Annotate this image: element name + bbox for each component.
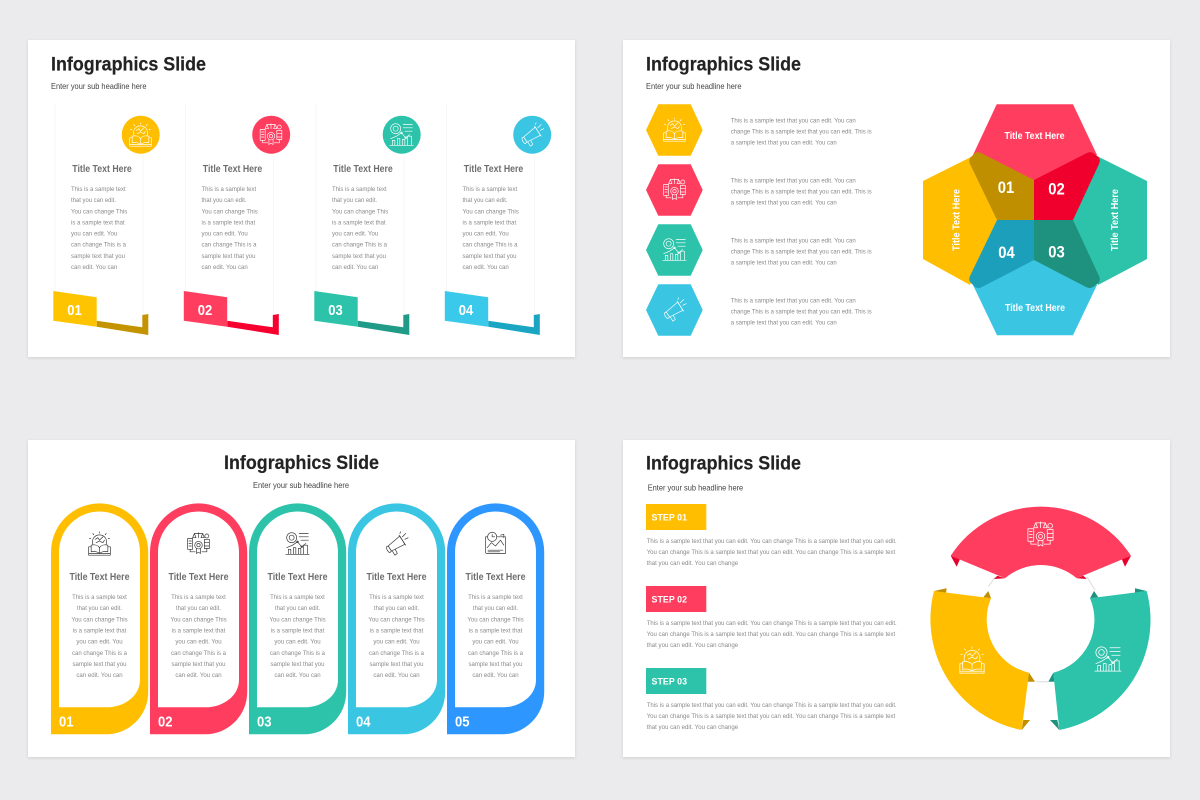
card 4 body: can change This is a [369, 650, 424, 657]
card 5 number: 05 [455, 714, 470, 730]
petal top [973, 104, 1097, 185]
column 2 body: that you can edit. [202, 197, 247, 204]
column 3 [314, 103, 421, 335]
petal right [1070, 156, 1147, 285]
card 4 body: that you can edit. [374, 605, 419, 612]
step 01 text: You can change This is a sample text that you can edit. You can change This is a sample text [647, 549, 895, 556]
column 1 body: can change This is a [71, 242, 126, 249]
column 4 tag [445, 291, 540, 335]
card 2 body: is a sample text that [172, 628, 226, 635]
card 3 body: is a sample text that [271, 628, 325, 635]
step 03 text: This is a sample text that you can edit. You can change This is a sample text that you can edit. [647, 702, 897, 709]
column 2 body: You can change This [202, 208, 258, 215]
step 01 text: that you can edit. You can change [647, 560, 738, 567]
column 3 body: sample text that you [332, 253, 386, 260]
card 1 body: is a sample text that [73, 628, 127, 635]
card 3 body: can edit. You can [274, 672, 321, 679]
heading: Infographics Slide [51, 54, 206, 76]
column 2 body [202, 186, 258, 271]
hexagon icon 1 [646, 104, 703, 156]
card 2 [150, 503, 247, 734]
column 1 [53, 103, 160, 335]
card 4 body [368, 594, 425, 679]
overlap 04 [969, 220, 1034, 288]
card 2 body: can change This is a [171, 650, 226, 657]
card 5 body: is a sample text that [469, 628, 523, 635]
column 4 body: you can edit. You [462, 231, 509, 238]
petal left [923, 156, 1000, 285]
card 4 icon [386, 532, 408, 555]
card 1 body: This is a sample text [72, 594, 127, 601]
card 5 body: This is a sample text [468, 594, 523, 601]
card 2 body: you can edit. You [175, 639, 222, 646]
text 2: This is a sample text that you can edit. You can [731, 178, 856, 184]
column 3 body: You can change This [332, 208, 389, 215]
step 02: STEP 02 [652, 594, 687, 604]
text 1: change This is a sample text that you can edit. This is [731, 128, 872, 136]
ring segment yellow [930, 588, 1035, 730]
column 4 body: can change This is a [462, 242, 518, 249]
column 1 body: sample text that you [71, 253, 125, 260]
card 3 body [269, 594, 326, 679]
column 4 body: can edit. You can [462, 264, 509, 271]
panel: five arched cards [28, 440, 575, 757]
column 2 body: is a sample text that [202, 220, 255, 226]
column 2 body: sample text that you [202, 253, 256, 260]
ring diagram [930, 507, 1151, 730]
label right: Title Text Here [1110, 189, 1121, 251]
label left: Title Text Here [952, 189, 962, 251]
card 2 body [170, 594, 227, 679]
text 1: a sample text that you can edit. You can [731, 140, 837, 146]
hexagon icon 4 [646, 284, 703, 336]
column 3 body: that you can edit. [332, 197, 377, 204]
card 4 title: Title Text Here [366, 571, 427, 583]
card 1 body: that you can edit. [77, 605, 122, 612]
hexagon icon 2 [646, 164, 703, 216]
subheading: Enter your sub headline here [253, 480, 349, 490]
step 02 text: that you can edit. You can change [647, 642, 738, 649]
column 2 tag [184, 291, 279, 335]
step 03 text: that you can edit. You can change [647, 724, 738, 731]
card 2 body: can edit. You can [175, 672, 222, 679]
card 5 body: can edit. You can [472, 672, 519, 679]
overlap 03 [1034, 220, 1100, 288]
card 4 number: 04 [356, 714, 371, 730]
column 3 body [332, 186, 389, 271]
card 2 body: that you can edit. [176, 605, 221, 612]
card 3 body: sample text that you [270, 661, 325, 668]
column 3 body: This is a sample text [332, 186, 387, 193]
card 1 body: sample text that you [72, 661, 127, 668]
card 3 body: You can change This [269, 616, 326, 623]
label top: Title Text Here [1004, 131, 1065, 142]
card 3 body: This is a sample text [270, 594, 325, 601]
number 03: 03 [1048, 244, 1065, 262]
card 5 body: sample text that you [468, 661, 523, 668]
overlap 02 [1034, 152, 1100, 220]
card 5 body: you can edit. You [472, 639, 519, 646]
card 4 body: is a sample text that [370, 628, 424, 635]
card 4 body: you can edit. You [373, 639, 420, 646]
column 1 body: is a sample text that [71, 220, 125, 226]
number 01: 01 [998, 179, 1014, 197]
column 3 tag [314, 291, 409, 335]
card 1 body: You can change This [71, 616, 128, 623]
column 4 title: Title Text Here [464, 163, 523, 175]
step 01: STEP 01 [652, 512, 687, 522]
column 1 body [71, 186, 128, 271]
column 2 tag: 02 [198, 302, 212, 319]
column 3 body: you can edit. You [332, 231, 379, 238]
column 1 title: Title Text Here [72, 163, 132, 175]
card 5 body: can change This is a [468, 650, 523, 657]
column 3 title: Title Text Here [333, 163, 393, 175]
text 3: a sample text that you can edit. You can [731, 260, 837, 266]
card 1 icon [89, 532, 110, 555]
overlap 01 [969, 152, 1034, 220]
column 1 body: can edit. You can [71, 264, 118, 271]
petal bottom [973, 255, 1097, 335]
card 4 [348, 503, 445, 734]
text 1: This is a sample text that you can edit. You can [731, 118, 856, 124]
subheading: Enter your sub headline here [648, 482, 743, 492]
step 03: STEP 03 [652, 676, 687, 686]
text 3: change This is a sample text that you can edit. This is [731, 248, 872, 256]
icon circle 4 [513, 116, 551, 154]
text 4: This is a sample text that you can edit. You can [731, 298, 856, 304]
column 3 body: can edit. You can [332, 264, 379, 271]
icon circle 2 [252, 116, 290, 154]
column 1 tag [53, 291, 148, 335]
panel: four columns with tags [28, 40, 575, 357]
text 4: change This is a sample text that you can edit. This is [731, 308, 872, 316]
card 5 body [467, 594, 524, 679]
card 2 icon [188, 533, 209, 554]
card 5 icon [486, 532, 506, 554]
step 02 [646, 586, 706, 612]
column 2 title: Title Text Here [203, 163, 262, 175]
ring segment teal [1048, 588, 1151, 730]
column 4 body: sample text that you [462, 253, 517, 260]
column 4 body: that you can edit. [462, 197, 508, 204]
heading: Infographics Slide [224, 452, 379, 474]
card 2 title: Title Text Here [168, 571, 229, 583]
card 1 body: can change This is a [72, 650, 127, 657]
ring segment red [951, 507, 1131, 579]
text 3 [731, 238, 872, 266]
icon circle 3 [383, 116, 421, 154]
card 3 body: you can edit. You [274, 639, 321, 646]
label bottom: Title Text Here [1005, 303, 1065, 314]
column 3 body: can change This is a [332, 242, 387, 249]
card 5 body: that you can edit. [473, 605, 518, 612]
card 1 body [71, 594, 128, 679]
card 4 body: You can change This [368, 616, 425, 623]
column 2 body: can change This is a [202, 242, 257, 249]
column 2 [184, 103, 290, 335]
step 02 text: You can change This is a sample text that you can edit. You can change This is a sample text [647, 631, 895, 638]
text 4 [731, 298, 872, 326]
card 1 [51, 503, 148, 734]
card 1 body: can edit. You can [76, 672, 123, 679]
text 2: a sample text that you can edit. You can [731, 200, 837, 206]
text 2 [731, 178, 872, 206]
card 1 body: you can edit. You [76, 639, 123, 646]
panel: hexagon list and flower diagram [623, 40, 1170, 357]
step 02 text: This is a sample text that you can edit. You can change This is a sample text that you can edit. [647, 620, 897, 627]
column 4 body: is a sample text that [462, 220, 516, 226]
column 4 [445, 103, 551, 335]
step 03 text: You can change This is a sample text that you can edit. You can change This is a sample text [647, 713, 895, 720]
card 4 body: can edit. You can [373, 672, 420, 679]
column 3 tag: 03 [328, 302, 343, 319]
column 1 body: You can change This [71, 208, 128, 215]
card 2 body: You can change This [170, 616, 227, 623]
column 2 body: can edit. You can [202, 264, 248, 271]
panel: steps and ring diagram [623, 440, 1170, 757]
icon circle 1 [122, 116, 160, 154]
card 3 number: 03 [257, 714, 272, 730]
number 04: 04 [998, 244, 1015, 262]
card 4 body: This is a sample text [369, 594, 424, 601]
card 5 title: Title Text Here [466, 571, 526, 583]
column 2 body: you can edit. You [202, 231, 248, 238]
subheading: Enter your sub headline here [51, 81, 147, 91]
step 03 text [647, 702, 897, 731]
card 3 [249, 503, 346, 734]
heading: Infographics Slide [646, 452, 801, 474]
number 02: 02 [1048, 180, 1065, 198]
step 01 [646, 504, 706, 530]
text 4: a sample text that you can edit. You can [731, 320, 837, 326]
hexagon icon 3 [646, 224, 703, 276]
subheading: Enter your sub headline here [646, 81, 742, 91]
card 4 body: sample text that you [370, 661, 424, 668]
card 3 body: that you can edit. [275, 605, 320, 612]
step 03 [646, 668, 706, 694]
card 2 body: sample text that you [172, 661, 226, 668]
column 4 tag: 04 [459, 302, 474, 319]
column 4 body: You can change This [462, 208, 519, 215]
text 1 [731, 118, 872, 146]
card 3 title: Title Text Here [268, 571, 328, 583]
step 01 text: This is a sample text that you can edit. You can change This is a sample text that you can edit. [647, 538, 897, 545]
card 3 icon [286, 533, 309, 554]
card 2 number: 02 [158, 714, 172, 730]
column 4 body [462, 186, 519, 271]
column 3 body: is a sample text that [332, 220, 386, 226]
column 1 tag: 01 [67, 302, 82, 319]
card 1 number: 01 [59, 714, 74, 730]
flower diagram [923, 104, 1147, 335]
card 5 body: You can change This [467, 616, 524, 623]
column 4 body: This is a sample text [462, 186, 517, 193]
heading: Infographics Slide [646, 54, 801, 76]
step 02 text [647, 620, 897, 649]
column 1 body: you can edit. You [71, 231, 118, 238]
card 5 [447, 503, 544, 734]
card 2 body: This is a sample text [171, 594, 226, 601]
text 2: change This is a sample text that you can edit. This is [731, 188, 872, 196]
step 01 text [647, 538, 897, 567]
card 1 title: Title Text Here [70, 571, 130, 583]
column 1 body: that you can edit. [71, 197, 116, 204]
text 3: This is a sample text that you can edit. You can [731, 238, 856, 244]
column 1 body: This is a sample text [71, 186, 126, 193]
column 2 body: This is a sample text [202, 186, 256, 193]
card 3 body: can change This is a [270, 650, 325, 657]
